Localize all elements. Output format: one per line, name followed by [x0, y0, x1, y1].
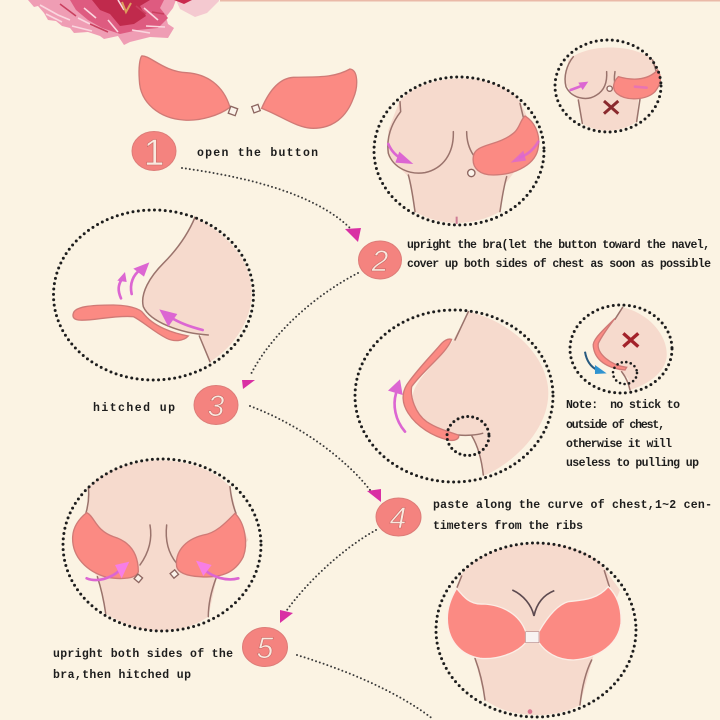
connector arrow: step 1 to step 2 — [182, 168, 361, 242]
step 5 caption — [53, 648, 233, 682]
step 1 bra illustration — [139, 56, 357, 128]
step 4 caption: paste along the curve of chest,1~2 cen- — [433, 499, 712, 512]
step 1 number badge — [132, 132, 176, 173]
step 4 caption: timeters from the ribs — [433, 520, 583, 533]
note text: Note: no stick to — [566, 399, 680, 412]
connector arrow: step 5 to final result — [297, 655, 433, 719]
panel: step 2 correct placement — [374, 77, 544, 225]
step 2 caption: cover up both sides of chest as soon as possible — [407, 258, 711, 271]
step 3 caption: hitched up — [93, 402, 175, 415]
panel: step 3 hitched up — [54, 210, 254, 380]
panel: step 2 wrong placement — [555, 40, 661, 132]
step 4 number badge: 4 — [390, 502, 406, 535]
panel: step 4 along the curve — [355, 310, 553, 482]
note text: useless to pulling up — [566, 457, 699, 470]
step 3 number badge — [194, 386, 238, 424]
step 2 number badge — [358, 241, 402, 279]
step 5 number badge: 5 — [257, 632, 274, 665]
step 1 caption: open the button — [197, 147, 318, 160]
top edge strip — [220, 0, 720, 2]
panel: final result — [436, 543, 636, 717]
connector arrow: step 4 to step 5 — [280, 530, 376, 623]
step 5 number badge — [242, 628, 288, 666]
step 2 caption — [407, 239, 711, 271]
step 4 number badge — [376, 498, 421, 536]
flower decoration — [28, 0, 219, 45]
step 3 number badge: 3 — [208, 390, 225, 423]
step 1 number badge: 1 — [144, 132, 164, 173]
step 5 caption: bra,then hitched up — [53, 669, 191, 682]
step 4 caption — [433, 499, 712, 533]
connector arrow: step 2 to step 3 — [242, 273, 358, 389]
note text: otherwise it will — [566, 438, 672, 451]
step 2 number badge: 2 — [371, 245, 389, 278]
panel: note wrong placement — [570, 305, 672, 393]
connector arrow: step 3 to step 4 — [250, 406, 381, 502]
panel: step 5 both sides — [63, 459, 261, 631]
note text — [566, 399, 699, 470]
step 5 caption: upright both sides of the — [53, 648, 233, 661]
step 2 caption: upright the bra(let the button toward the navel, — [407, 239, 710, 252]
note text: outside of chest, — [566, 419, 665, 432]
